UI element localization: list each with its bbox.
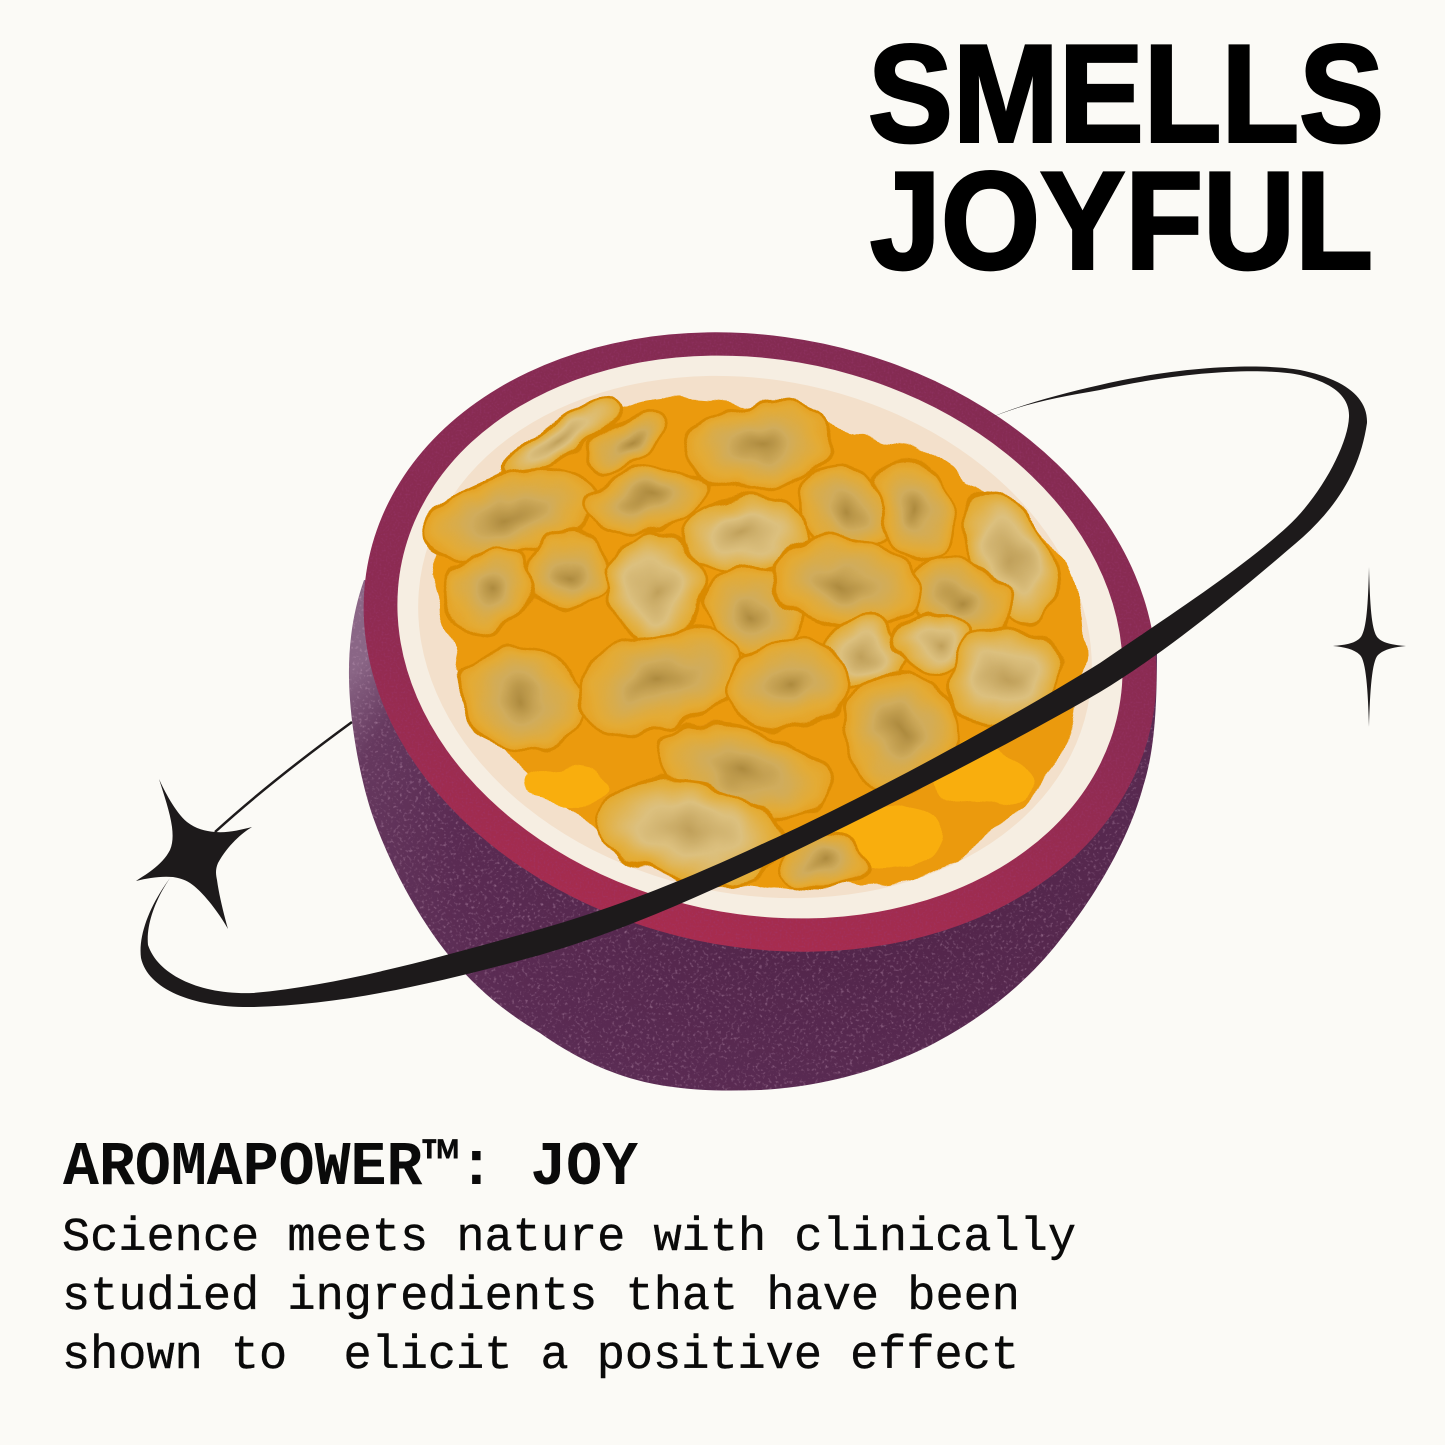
outer rim [305,261,1215,1023]
icon: small four-point star [1333,567,1406,727]
icon: large four-point star [136,779,252,929]
rim texture [350,325,1170,960]
title: JOYFUL [870,144,1373,298]
orbit ring [141,367,1367,1007]
passion fruit [348,332,1157,1090]
title [868,16,1384,298]
skin speckles [340,570,1170,1100]
white pith [344,290,1176,984]
pink inner pith shadow [369,315,1141,959]
flesh base [432,397,1083,885]
body text: studied ingredients that have been [62,1271,1020,1324]
orbit back line behind fruit [215,722,352,832]
subheading: AROMAPOWER™: JOY [63,1132,639,1203]
bright juice highlights [528,745,1033,869]
body text [62,1212,1076,1383]
fruit skin [349,580,1157,1091]
body text: Science meets nature with clinically [62,1212,1076,1265]
orange flesh and seeds [415,385,1083,895]
body text: shown to elicit a positive effect [62,1330,1019,1383]
seed cluster [415,385,1076,895]
title: SMELLS [868,16,1384,172]
